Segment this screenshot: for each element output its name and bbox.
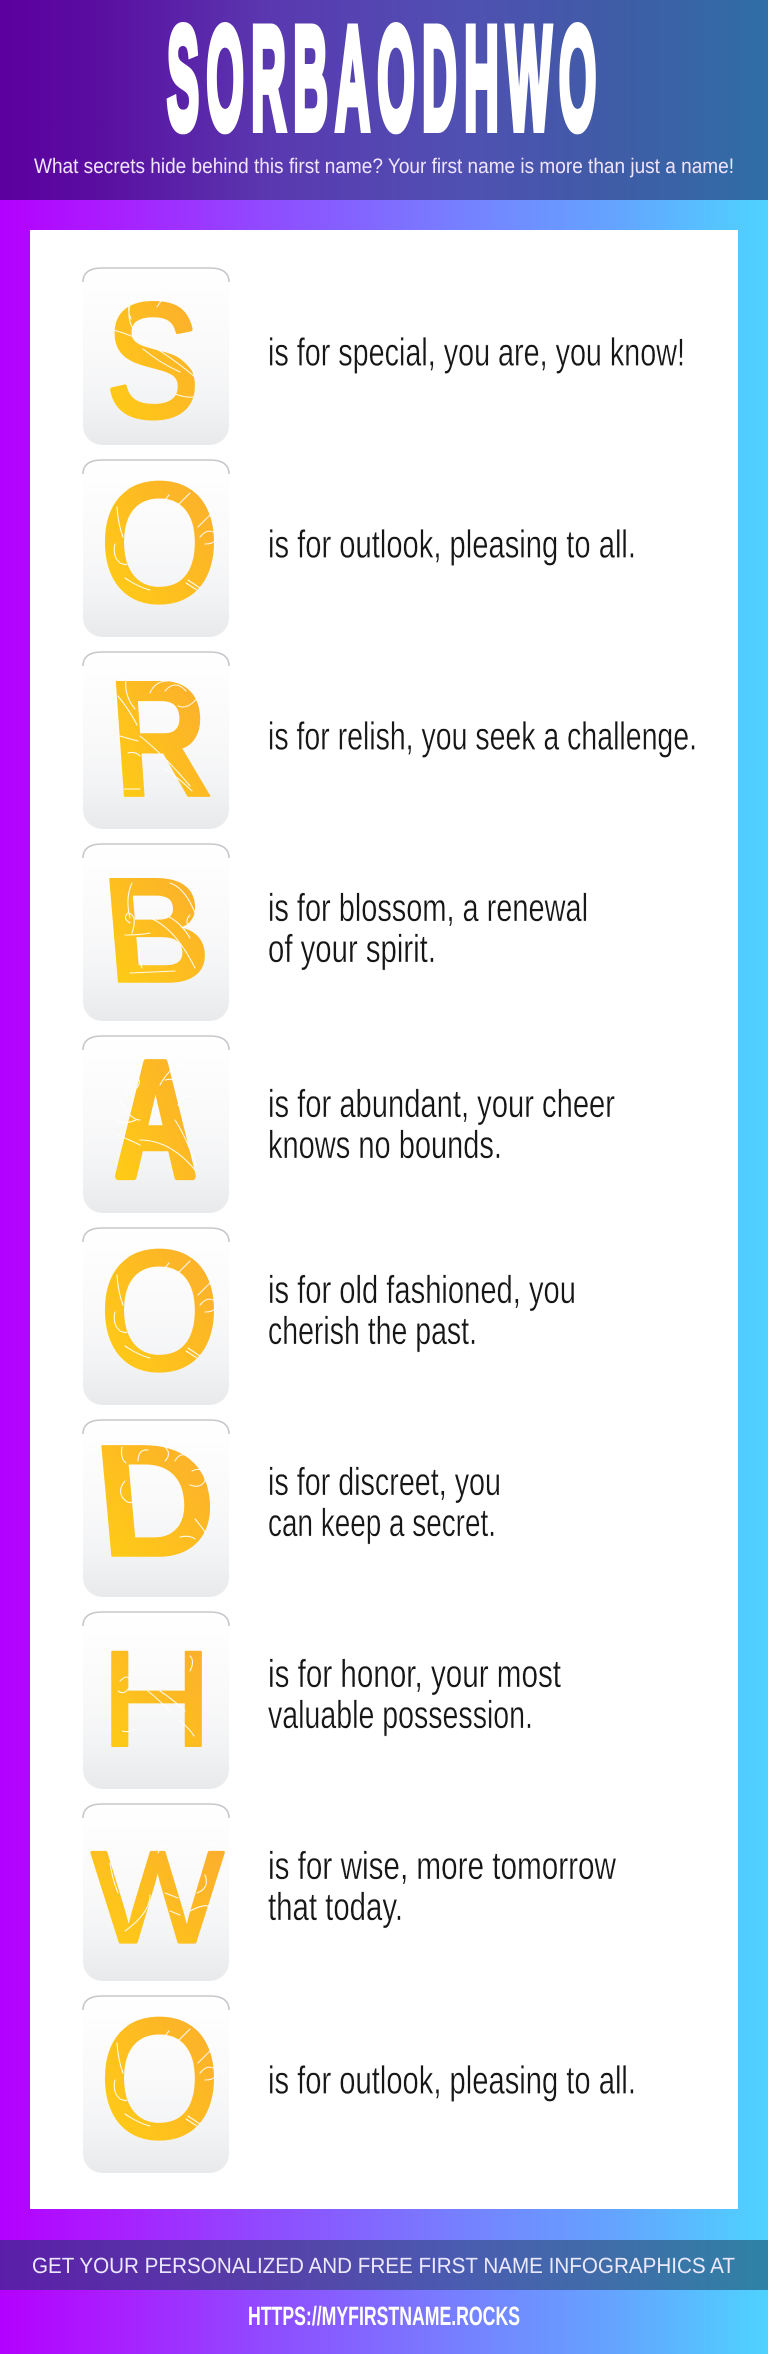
icon: letter D tile: D <box>88 1412 224 1591</box>
header band <box>0 0 768 200</box>
text: of your spirit. <box>268 928 436 971</box>
row: O <box>83 1217 576 1405</box>
icon: letter H tile: H <box>99 1623 214 1776</box>
row: R <box>83 647 697 833</box>
text: is for outlook, pleasing to all. <box>268 524 636 567</box>
text: that today. <box>268 1886 403 1929</box>
text: is for wise, more tomorrow <box>268 1845 617 1888</box>
icon: letter W tile: W <box>91 1825 224 1971</box>
text: is for outlook, pleasing to all. <box>268 2060 636 2103</box>
text: is for blossom, a renewal <box>268 887 588 930</box>
text: is for discreet, you <box>268 1461 501 1504</box>
icon: letter A tile <box>83 1028 229 1213</box>
icon: letter S tile <box>83 267 229 452</box>
icon: letter B tile: B <box>98 847 216 1015</box>
row: H <box>83 1611 561 1789</box>
icon: letter O tile: O <box>100 449 219 637</box>
row: O <box>83 1985 636 2173</box>
row: B <box>83 843 588 1021</box>
text: can keep a secret. <box>268 1502 496 1545</box>
icon: letter O tile: O <box>100 1217 219 1405</box>
row: D <box>83 1412 501 1597</box>
icon: letter R tile: R <box>105 647 215 833</box>
text: is for old fashioned, you <box>268 1269 576 1312</box>
title: SORBAODHWO <box>167 0 604 160</box>
icon: letter H tile <box>83 1611 229 1789</box>
row: W <box>83 1803 617 1981</box>
text: is for abundant, your cheer <box>268 1083 615 1126</box>
icon: letter S tile: S <box>106 271 199 452</box>
row: A <box>83 1028 615 1213</box>
white content panel <box>30 230 738 2209</box>
footer band <box>0 2240 768 2290</box>
text: knows no bounds. <box>268 1124 502 1167</box>
footer url: HTTPS://MYFIRSTNAME.ROCKS <box>248 2301 520 2331</box>
text: cherish the past. <box>268 1310 477 1353</box>
text: valuable possession. <box>268 1694 533 1737</box>
footer call to action: GET YOUR PERSONALIZED AND FREE FIRST NAME INFOGRAPHICS AT <box>32 2253 735 2278</box>
row: S <box>83 267 685 452</box>
icon: letter O tile: O <box>100 1985 219 2173</box>
row: O <box>83 449 636 637</box>
icon: letter A tile: A <box>115 1028 196 1212</box>
text: is for honor, your most <box>268 1653 561 1696</box>
